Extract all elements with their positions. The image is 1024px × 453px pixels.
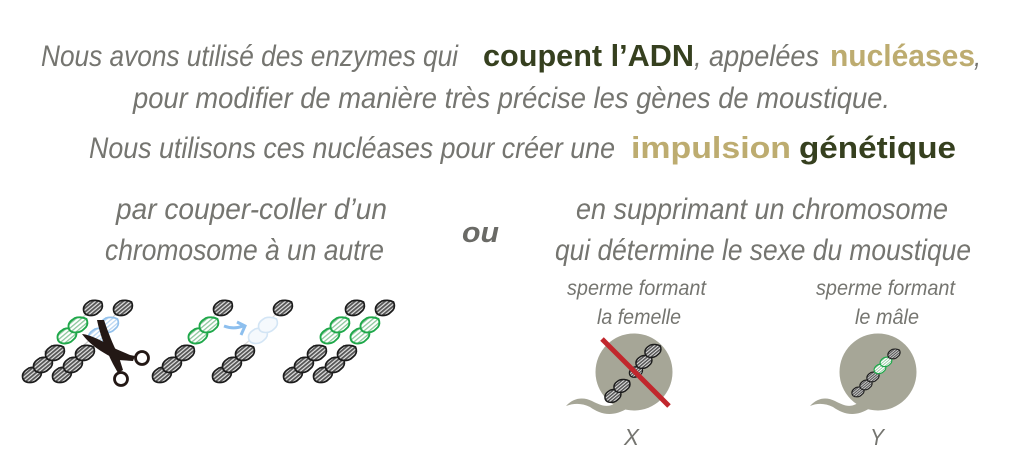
label: male-forming sperm: sperme formant	[816, 277, 956, 300]
title: first sentence, line 1: coupent l’ADN	[483, 38, 694, 73]
title: first sentence, line 1: Nous avons utilisé des enzymes qui	[41, 40, 459, 73]
text: right method	[555, 193, 971, 267]
icon: Y sperm with green segment	[810, 334, 916, 414]
icon: X sperm crossed out	[566, 334, 672, 414]
title: first sentence, line 1: , appelées	[694, 40, 819, 73]
text: right method: qui détermine le sexe du moustique	[555, 234, 971, 267]
label: female-forming sperm: sperme formant	[567, 277, 707, 300]
icon: scissors	[82, 320, 148, 386]
text: first sentence, line 2: pour modifier de manière très précise les gènes de moustique.	[132, 82, 890, 115]
label: Y: Y	[870, 424, 886, 450]
arrow: blue transfer	[224, 322, 245, 335]
text: left method	[105, 193, 387, 267]
diagram: result with two green segments	[284, 300, 394, 382]
title: first sentence, line 1: nucléases	[830, 38, 975, 73]
text: left method: par couper-coller d’un	[115, 193, 387, 226]
text: or: ou	[462, 217, 499, 249]
strike: red line	[602, 339, 669, 406]
heading: gene drive sentence: Nous utilisons ces nucléases pour créer une	[89, 132, 615, 165]
heading: gene drive sentence: impulsion	[631, 130, 791, 165]
label: male-forming sperm: le mâle	[855, 306, 919, 329]
text: left method: chromosome à un autre	[105, 234, 384, 267]
diagram: transfer step with arrow	[152, 300, 292, 382]
title: first sentence, line 1: ,	[974, 40, 981, 73]
heading: gene drive sentence	[89, 130, 956, 165]
title: first sentence, line 1	[41, 38, 981, 73]
label: female-forming sperm: la femelle	[597, 306, 681, 329]
diagram: cut step with scissors	[22, 300, 148, 386]
label: X: X	[623, 424, 641, 450]
label: male-forming sperm	[816, 277, 956, 329]
text: right method: en supprimant un chromosome	[576, 193, 948, 226]
label: female-forming sperm	[567, 277, 707, 329]
heading: gene drive sentence: génétique	[799, 130, 956, 165]
